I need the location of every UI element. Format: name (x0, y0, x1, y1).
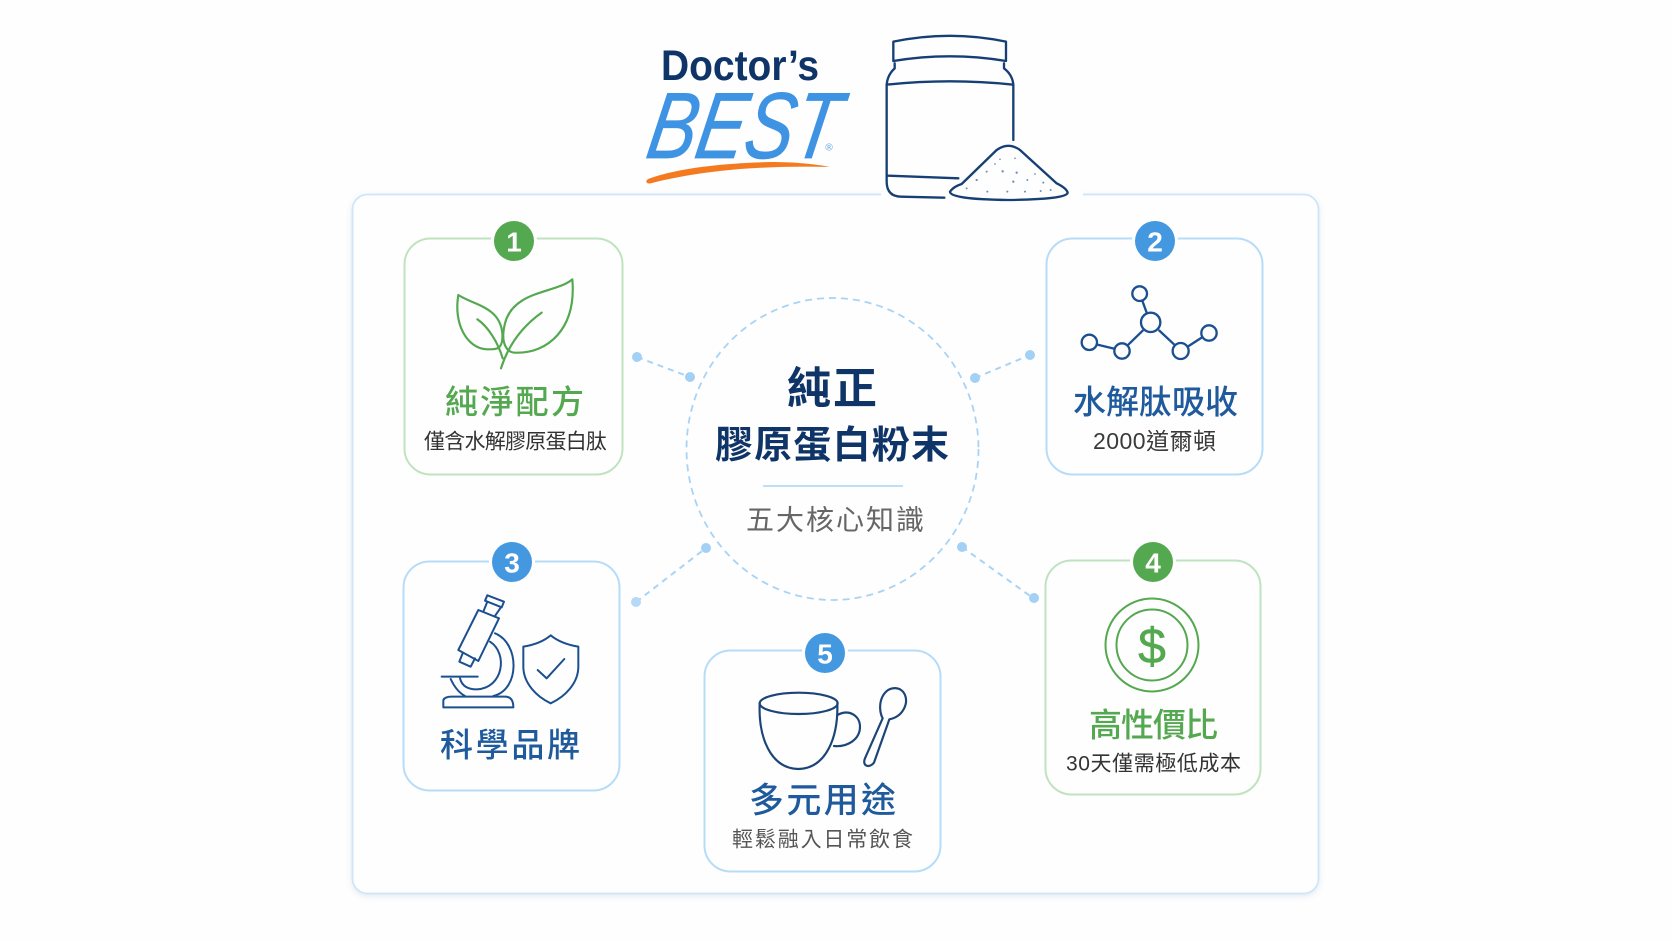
badge 1 (491, 218, 537, 264)
card 1: pure formula (404, 218, 622, 474)
card 2 text: 2000道爾頓 (1093, 428, 1216, 454)
card 5 heading: 多元用途 (749, 782, 896, 820)
logo registered mark: ® (825, 142, 833, 154)
icon: leaves (457, 279, 573, 368)
card 4 text: 30天僅需極低成本 (1066, 752, 1241, 776)
badge 2 (1132, 218, 1178, 264)
badge 4: 4 (1145, 548, 1161, 578)
icon: cup and spoon (760, 688, 906, 769)
connector: center to card 2 (970, 350, 1035, 383)
badge 2: 2 (1147, 226, 1163, 258)
connector: center to card 4 (957, 542, 1039, 603)
card 4 heading: 高性價比 (1089, 706, 1218, 744)
panel: main container (352, 188, 1318, 894)
card 5: versatile use (704, 630, 940, 872)
badge 3: 3 (504, 548, 520, 578)
badge 4 (1130, 539, 1176, 585)
connector: center to card 1 (632, 352, 695, 382)
icon: collagen jar with powder (887, 36, 1068, 200)
logo: Doctor's Best (640, 42, 854, 184)
icon: molecule (1082, 286, 1217, 359)
card 2: hydrolyzed peptide absorption (1046, 218, 1262, 474)
title line 1: 純正 (787, 364, 877, 414)
badge 1: 1 (506, 226, 522, 258)
card 3 heading: 科學品牌 (440, 726, 580, 764)
subtitle: 五大核心知識 (746, 504, 924, 536)
logo orange swoosh (646, 162, 830, 184)
card 1 heading: 純淨配方 (445, 384, 584, 420)
icon: coin: $ (1138, 618, 1166, 674)
badge 5 (802, 630, 848, 676)
card 2 heading: 水解肽吸收 (1073, 384, 1238, 420)
card 3: scientific brand (404, 539, 620, 790)
card 4: high value (1046, 539, 1260, 794)
connector: center to card 3 (631, 543, 711, 607)
badge 3 (489, 539, 535, 585)
card 1 text: 僅含水解膠原蛋白肽 (424, 430, 607, 454)
icon: microscope and shield (442, 595, 578, 707)
title line 2: 膠原蛋白粉末 (715, 425, 949, 467)
logo word: BEST: BEST (640, 74, 854, 179)
badge 5: 5 (817, 638, 833, 670)
center circle: title (686, 298, 978, 600)
icon: coin (1106, 598, 1198, 692)
card 5 text: 輕鬆融入日常飲食 (732, 828, 913, 852)
logo word: Doctor's: Doctor’s (661, 42, 819, 90)
